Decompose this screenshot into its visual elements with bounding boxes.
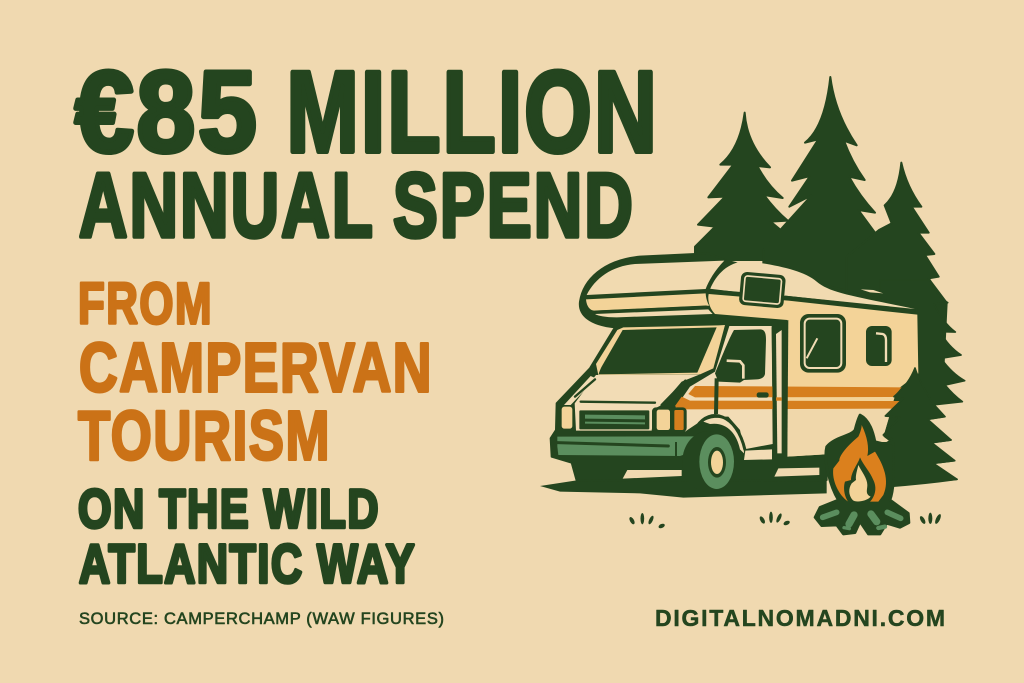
body side panel bbox=[708, 294, 918, 457]
icon: pine trees bbox=[695, 77, 947, 370]
side window small bbox=[866, 326, 892, 366]
icon: foreground small pine bbox=[860, 368, 957, 493]
text: from: FROM bbox=[78, 272, 213, 336]
heading: annual spend: SPEND bbox=[393, 156, 635, 257]
roof line bbox=[707, 290, 915, 311]
indicator bbox=[674, 410, 684, 430]
campervan bbox=[551, 253, 920, 492]
pillar bbox=[772, 320, 788, 458]
left headlight bbox=[562, 407, 572, 429]
body roof panel bbox=[710, 261, 915, 309]
door sill bbox=[744, 449, 772, 460]
heading: €85 million bbox=[75, 48, 659, 176]
text: atlantic way: ATLANTIC WAY bbox=[79, 533, 416, 594]
side window large bbox=[800, 314, 846, 373]
text: campervan: CAMPERVAN bbox=[79, 328, 433, 406]
over-cab roof bbox=[586, 261, 724, 317]
orange text block bbox=[78, 272, 433, 474]
grass tufts bbox=[628, 512, 942, 529]
logs bbox=[823, 512, 901, 529]
flame core bbox=[849, 465, 871, 501]
heading: €85 million: €85 bbox=[75, 48, 260, 176]
wheel arch bbox=[703, 418, 744, 453]
fire outline bbox=[815, 415, 909, 534]
grille bbox=[579, 410, 649, 429]
a-pillar highlight bbox=[564, 376, 596, 405]
heading: €85 million: MILLION bbox=[286, 48, 659, 176]
flame core outline bbox=[844, 457, 875, 504]
door seam bbox=[710, 378, 723, 414]
side stripes bbox=[675, 386, 902, 409]
tree gap highlight bbox=[861, 289, 883, 293]
door window bbox=[715, 329, 766, 383]
text: on the wild: ON THE WILD bbox=[78, 478, 380, 539]
icon: right tree lower trunk bbox=[880, 280, 965, 487]
green location text block bbox=[78, 478, 416, 594]
icon: campfire bbox=[815, 415, 909, 534]
flame bbox=[833, 425, 886, 502]
text: tourism: TOURISM bbox=[78, 396, 331, 474]
wheel bbox=[682, 431, 734, 492]
roof vent bbox=[739, 271, 786, 309]
windscreen bbox=[599, 327, 717, 374]
website credit: DIGITALNOMADNI.COM bbox=[655, 605, 945, 631]
ground shadow bbox=[540, 472, 827, 498]
illustration: campervan scene bbox=[540, 77, 965, 534]
door handle bbox=[757, 392, 769, 398]
ground gaps under van bbox=[623, 468, 819, 479]
headline text block bbox=[75, 48, 659, 257]
right headlight housing bbox=[652, 407, 687, 432]
over-cab line bbox=[596, 307, 706, 312]
windscreen surround bbox=[596, 325, 725, 375]
body lower panel bbox=[787, 408, 892, 457]
bumper bbox=[557, 436, 699, 456]
right headlight bbox=[657, 410, 670, 430]
arch outline bbox=[697, 416, 745, 450]
hood bbox=[575, 375, 699, 431]
source note: SOURCE: CAMPERCHAMP (WAW FIGURES) bbox=[79, 610, 444, 628]
heading: annual spend: ANNUAL bbox=[79, 156, 375, 257]
cab door panel bbox=[675, 326, 773, 449]
van silhouette bbox=[551, 253, 920, 481]
door window mirror bbox=[727, 361, 743, 379]
hood panel lines bbox=[575, 379, 685, 405]
